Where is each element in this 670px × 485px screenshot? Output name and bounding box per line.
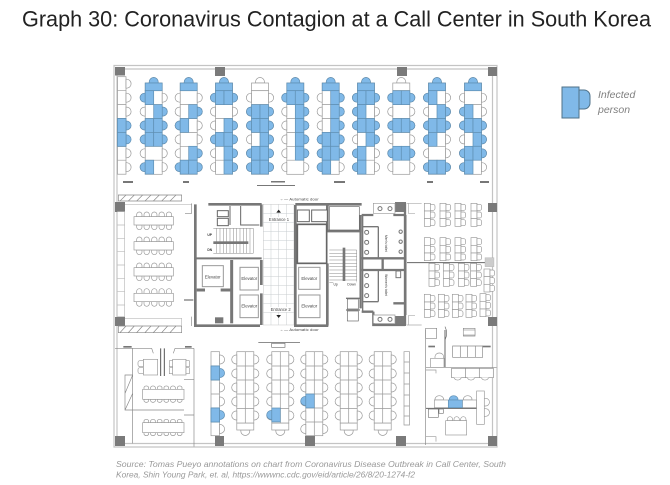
right staircase: Down xyxy=(347,282,356,286)
toilet block xyxy=(362,203,405,325)
window desk column with infected seats xyxy=(118,77,131,174)
elevators xyxy=(202,266,320,318)
automatic door labels: ←— Automatic door xyxy=(280,327,319,332)
automatic door labels: ←— Automatic door xyxy=(280,196,319,201)
desk row 9 xyxy=(423,78,451,174)
elevators: Elevator xyxy=(301,304,318,309)
small rooms xyxy=(215,206,359,323)
desk row 5 xyxy=(282,78,309,174)
structural pillars xyxy=(115,67,497,446)
pillars over desks xyxy=(215,436,315,446)
elevators: Elevator xyxy=(241,304,258,309)
title: Graph 30: Coronavirus Contagion at a Call Center in South Korea xyxy=(22,6,652,32)
desk row 6 xyxy=(317,78,344,174)
toilets and right wing xyxy=(362,203,495,340)
central core xyxy=(195,196,362,332)
toilet block: Women's toilet xyxy=(384,274,388,296)
lower desk column C with infected seat xyxy=(267,352,294,436)
corridor with entrances: Entrance 1 xyxy=(269,217,290,222)
corridor with entrances xyxy=(263,204,294,325)
bottom-left meeting rooms xyxy=(115,342,300,447)
left staircase: UP xyxy=(207,233,213,237)
wall markers below upper office xyxy=(123,181,489,186)
desk row 1 xyxy=(140,78,167,174)
desk row 10 xyxy=(459,78,487,174)
lower desk column A with infected seats xyxy=(211,352,225,436)
left wing meeting area xyxy=(117,195,193,333)
left staircase: DN xyxy=(207,248,213,252)
core walls xyxy=(195,204,362,326)
bottom-right office xyxy=(426,330,497,445)
legend: infected person xyxy=(562,87,637,118)
lower desk column B xyxy=(232,352,259,436)
elevators: Elevator xyxy=(205,275,221,280)
right staircase xyxy=(329,248,357,286)
lower desk column D with infected seat xyxy=(301,352,328,436)
desk row 4 xyxy=(246,78,274,174)
right staircase: Up xyxy=(334,282,338,286)
corridor with entrances: Entrance 2 xyxy=(271,307,291,312)
desk row 3 xyxy=(210,78,238,174)
elevators: Elevator xyxy=(301,276,318,281)
legend label: person xyxy=(597,104,630,116)
legend label: Infected xyxy=(598,89,637,101)
desk row 8 xyxy=(388,78,415,174)
lower desk column E xyxy=(335,352,362,436)
left staircase xyxy=(207,228,253,253)
elevators: Elevator xyxy=(241,276,258,281)
building outer walls xyxy=(114,66,497,447)
icon: infected seat xyxy=(562,87,590,118)
thin window column xyxy=(404,352,410,425)
source note: Korea, Shin Young Park, et. al, https://wwwnc.cdc.gov/eid/article/26/8/20-1274-f2 xyxy=(116,470,415,480)
automatic door labels xyxy=(280,196,319,332)
desk row 7 xyxy=(352,78,380,174)
source note: Source: Tomas Pueyo annotations on chart from Coronavirus Disease Outbreak in Call Center, South xyxy=(116,459,506,469)
desk row 2 xyxy=(175,78,202,174)
wing seating xyxy=(424,203,495,317)
infected seat in office xyxy=(448,396,462,408)
toilet block: Men's toilet xyxy=(384,235,388,252)
floor plan xyxy=(114,66,497,447)
lower desk column F xyxy=(369,352,396,436)
